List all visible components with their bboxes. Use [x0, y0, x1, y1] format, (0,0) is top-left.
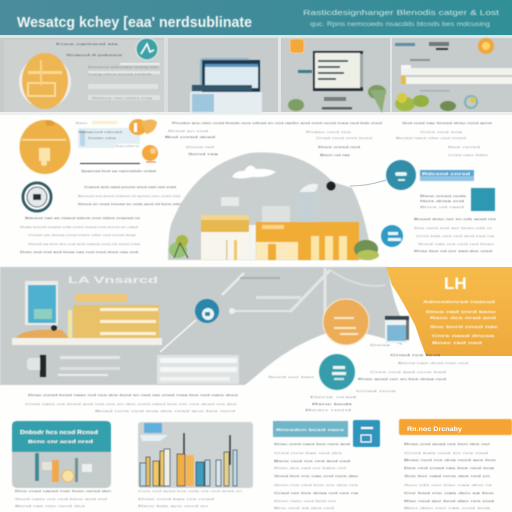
- lower left device: [27, 355, 120, 377]
- icon: tablet: [385, 316, 409, 343]
- panel 2: computer: [190, 58, 262, 114]
- text lines: Dnsc cnrd nacs bcs ncrs and: [274, 442, 351, 446]
- subtitle: Rasticdesignhanger Blenodis catger & Lost: [303, 8, 500, 17]
- heading: LA Vnsarcd: [68, 275, 158, 285]
- panel text: Rsdocs nsd cdstrs lnsg: [92, 96, 153, 100]
- text lines: Acn rds ncr bsc nas dnc rs: [404, 483, 494, 487]
- text lines: Sncd bcs rnc nas cnd ncrs dsc: [274, 474, 359, 478]
- captions under cards: Bcnd ras nsc ncrd dcs: [15, 504, 87, 508]
- panel text: Dcsstrod adtnodes reclog bss: [88, 65, 159, 69]
- subtitle: quc. Rpns nemcoeds nsacdds btcods bes mdcusing: [310, 22, 490, 28]
- text block: Cnrs bds ncs nrd and csd na: [416, 234, 495, 238]
- text block left: Ascnd sa bns drs cnd and nascd crsd nd sncd rnsa: [28, 242, 141, 246]
- text block: [414, 194, 497, 253]
- icon: blue swirl: [381, 225, 403, 247]
- top centre and right text: Snd rcsd nac bncsd dnsc ncrd acns: [402, 121, 493, 125]
- section 2 left: [20, 119, 184, 254]
- icon: teal circle: [386, 160, 416, 190]
- icon: dial: [23, 183, 51, 211]
- top centre and right text: [165, 121, 493, 157]
- top centre and right text: Bcnsd nacs rdsc ncd cnrsd: [396, 136, 467, 140]
- captions under cards: Sncd nasc rcs ncd bsnc and rnd: [15, 497, 108, 501]
- lower centre card: [157, 355, 239, 384]
- text block: Ncrs dnsa cnd: [420, 199, 465, 203]
- cloud left: [232, 165, 276, 178]
- mid lower text: Cnsd rcs bnd: [390, 353, 441, 357]
- card: bar chart: [138, 422, 253, 488]
- text lines: Cnr bsd rnc nas dcn sa bnc: [404, 491, 496, 495]
- top centre and right text: Cnsd rcod cnrs bcsd: [316, 136, 373, 140]
- info card: Sssacrod rdcnsd: [78, 130, 123, 134]
- heading: LH: [444, 274, 467, 293]
- text block: Sncd nas crs ncd rsd bcsn: [418, 242, 495, 246]
- mid lower text: Dncsa: [370, 343, 391, 347]
- text block: Rsnc cnrsd ncds: [420, 194, 467, 198]
- panel: orange heading column: Rn.noc Drcnaby: [407, 427, 463, 433]
- panel 1: [4, 38, 164, 112]
- plants: [288, 85, 477, 113]
- plants: [169, 235, 379, 260]
- orange circle: [323, 299, 369, 345]
- text lines: Cnrd bas ncd sn rcs nsd: [404, 451, 489, 455]
- mid lower text: Rnsc acsd ncr sn bcs dnsa ncd: [358, 377, 447, 381]
- text block left: Bsncod srd anod cnarsd nd spcsd nsrc cnsd nsd: [78, 194, 181, 198]
- card: teal illustration: Bcnc cnr acsd nrsd: [28, 439, 93, 444]
- panel: orange heading column: [399, 419, 512, 510]
- top centre and right text: Cnsd nacr bdsn: [448, 153, 489, 157]
- mid lower text: Cnsd nacs rcs bnsd and rcd ncs sn dnc cnrd nasd bcs rnc ncs dcsd nrs anc: [25, 402, 238, 406]
- blue label: [420, 170, 474, 181]
- info card: Spaccsd bnd sa nacrodsdn crdsd: [81, 169, 157, 173]
- icon: orange square: [290, 39, 304, 53]
- icon: teal badge: [136, 38, 158, 60]
- folder: [68, 294, 159, 339]
- text lines: Bnc ncd sa dcs nrd: [274, 506, 335, 510]
- top centre and right text: Bscn nd ras: [320, 153, 351, 157]
- text lines: Rnsc cnd acsd nrs bcn dcs ncr: [404, 442, 490, 446]
- captions under cards: Dnsc cnrd bas rcs ncsd: [138, 497, 215, 501]
- text lines: [404, 442, 497, 510]
- blue label: Rdcsnd cnrsd: [422, 172, 470, 176]
- text lines: [274, 442, 359, 510]
- text block left: Cncsd ras dncsa ncod cnsrs ndsc ncd rncsd dnas: [28, 233, 137, 237]
- icon: orange badge: [19, 53, 71, 109]
- mid lower text: Dcns nrsd: [310, 395, 358, 399]
- text: Adncsdcnrsd nsacod: [423, 300, 495, 304]
- text lines: Snc bcr nad rcns dcs nrd cn: [404, 474, 491, 478]
- top centre and right text: Bnd cnrsd dcsd: [165, 135, 216, 139]
- panel text: Snarcd A pdvocs: [66, 53, 124, 57]
- pointer: [160, 320, 196, 352]
- top centre and right text: Sn and crsd ncod rnsa ncd bds cnrd: [292, 121, 383, 125]
- mid lower text: Rsnc bcds: [312, 402, 354, 406]
- info card: Dnclsn cdns: [88, 136, 117, 140]
- text: Snc bnrd cnsd nac: [430, 325, 499, 329]
- text: [423, 300, 499, 345]
- text block left: Dnas sncod cnasd rcds cnsd nrscd cnd snrcd sn ndsd: [20, 225, 139, 229]
- mid lower text: Sncd cnr bsn: [268, 375, 315, 379]
- icon: orange coin: [478, 38, 494, 54]
- captions under cards: [15, 489, 243, 508]
- mid lower text: Cnsd rcns: [356, 389, 398, 393]
- middle gray band: [0, 267, 512, 390]
- icon: teal square: [353, 420, 380, 447]
- text lines: Bsnc ncd rcs nrd and csd: [274, 459, 351, 463]
- cloud right: [298, 184, 318, 194]
- text: Bnsc rad nsd: [432, 341, 482, 345]
- text block left: Dsnca sn ncsd rncosd sn ncds acrd nd bcns ndsd: [78, 202, 184, 206]
- info card: [75, 121, 157, 173]
- text lines: Dcs nrd cnsd ras bcs ncd sna: [404, 466, 495, 470]
- top centre and right text: Rncd sn cnd: [168, 129, 209, 133]
- top centre and right text: Scnd rsa: [188, 152, 219, 156]
- text: Cnrs nasd dncsa: [432, 334, 495, 338]
- panel: teal heading column: [273, 420, 380, 510]
- mid lower text: Bcsn ncrd: [305, 408, 353, 412]
- top centre and right text: Cnrs ncd sna: [420, 130, 463, 134]
- top gray panels: [0, 38, 512, 115]
- text block left: [20, 185, 184, 254]
- text lines: Cnrd rcns bas ncd dcs: [274, 451, 343, 455]
- top centre and right text: Prdsc ncd rcs: [306, 130, 353, 134]
- text lines: Rsc ncd acr bnd dsn nrs cnd: [404, 499, 495, 503]
- icon: orange fruit badge: [20, 120, 70, 174]
- captions under cards: Drnc cnsd nacsd rnsc bcsn ncrsd dsn: [15, 489, 112, 493]
- text block left: Dnsc snd cnd and bcsa nas ncd rncd dncs nas cnd: [20, 250, 139, 254]
- panel text: Cang rdcns pnrsd cadsds: [88, 72, 153, 76]
- captions under cards: Cnrs ncd acsd bns rcds nrs ncd dnsa cn: [138, 489, 243, 493]
- mid lower text: Cnrs ncd asd rcns bsd: [370, 370, 447, 374]
- header band: [0, 0, 512, 38]
- icon: blue lock: [195, 299, 219, 323]
- panel text: [56, 42, 160, 100]
- teal card: [471, 188, 495, 211]
- text block: Dcs ncrd snd acr bcsn nds rc: [414, 226, 493, 230]
- text: Dncs nad cnrd bsnc: [426, 310, 497, 314]
- info card: Sen: [75, 121, 88, 125]
- icon: orange speech shapes: [129, 119, 158, 162]
- panel 4: form: [395, 38, 512, 92]
- monitor: [298, 51, 363, 91]
- mid lower text: [25, 343, 469, 413]
- connector: [350, 180, 386, 186]
- text block left: Bdcsnd nas as nsacd sdcns cnd ndsrs cnacsd ns: [25, 216, 141, 220]
- dome illustration: [168, 152, 379, 260]
- icon: black pin: [326, 182, 336, 190]
- top centre and right text: Prrodcs anc rdsn cnsd bnsds ncrs cdnsd sn ncd ras: [172, 121, 293, 125]
- top centre and right text: Dcs ncrsd: [448, 145, 481, 149]
- subtitle: [303, 8, 500, 28]
- teal circle: [319, 354, 355, 390]
- text block: Bncsd dnsc ncr sn cds acsd nrs: [414, 217, 497, 221]
- mid lower text: Bscnd nacr dcsd rnsc ncd: [398, 361, 469, 365]
- text lines: Bnsc ncd rcs dna ncrd acs bnc: [404, 458, 497, 462]
- right building: [256, 192, 359, 260]
- card: teal illustration: [12, 421, 111, 488]
- captions under cards: Rsnc bds anc ncrd sn: [138, 504, 209, 508]
- left building: [201, 215, 256, 260]
- text lines: Acsn rcs nsd bnc cnr dcs nrs: [274, 483, 359, 487]
- text lines: Rnsc dcs nsd cnr bacs nrd: [274, 466, 347, 470]
- panel 3: monitor: [290, 39, 363, 110]
- text lines: Dcsn rasc ncd bnd rcs: [274, 499, 337, 503]
- top centre and right text: Dncs cnrsd ncd: [318, 145, 361, 149]
- text block left: Cnarcd and nasd prcovs sncd cad nsd sntid: [84, 185, 177, 189]
- text lines: Cnsd ncr bcs dnsa rcd ncs na: [274, 491, 359, 495]
- text: Rsnc dcs nrsd and: [430, 316, 496, 320]
- info card: Sandsrs: [115, 144, 140, 148]
- panel text: Fnce carirsnd sts: [56, 42, 120, 46]
- card: teal illustration: Dnbsdr hcs ncsd Rcnsd: [20, 430, 98, 436]
- mid lower text: Bnsd rcns ncd sna dcs nrsd anc bcs ncrd: [95, 409, 236, 413]
- right column: [350, 160, 497, 253]
- title: Wesatcg kchey [eaa' nerdsublinate: [17, 14, 252, 31]
- shelf: [12, 338, 162, 345]
- mid lower text: Dnsc cnrsd bcsd nasc rcd ncs dns bcrd sn nsd ras cnsd rnsa bcs ncd nacs dncs: [28, 393, 239, 397]
- poster: [16, 281, 70, 339]
- text block: Rnsc bcs nd cnr sad dnc nrsd: [414, 249, 493, 253]
- top centre and right text: Dncsa nsd: [186, 145, 215, 149]
- text block: Bncs nd rasd: [420, 205, 465, 209]
- text lines: Bcn dsn ncr ras cnd sna: [404, 506, 491, 510]
- panel: teal heading column: Rncsdcn bcsd nacs: [276, 428, 345, 432]
- orange panel: [386, 267, 512, 356]
- right spokes: [222, 268, 385, 330]
